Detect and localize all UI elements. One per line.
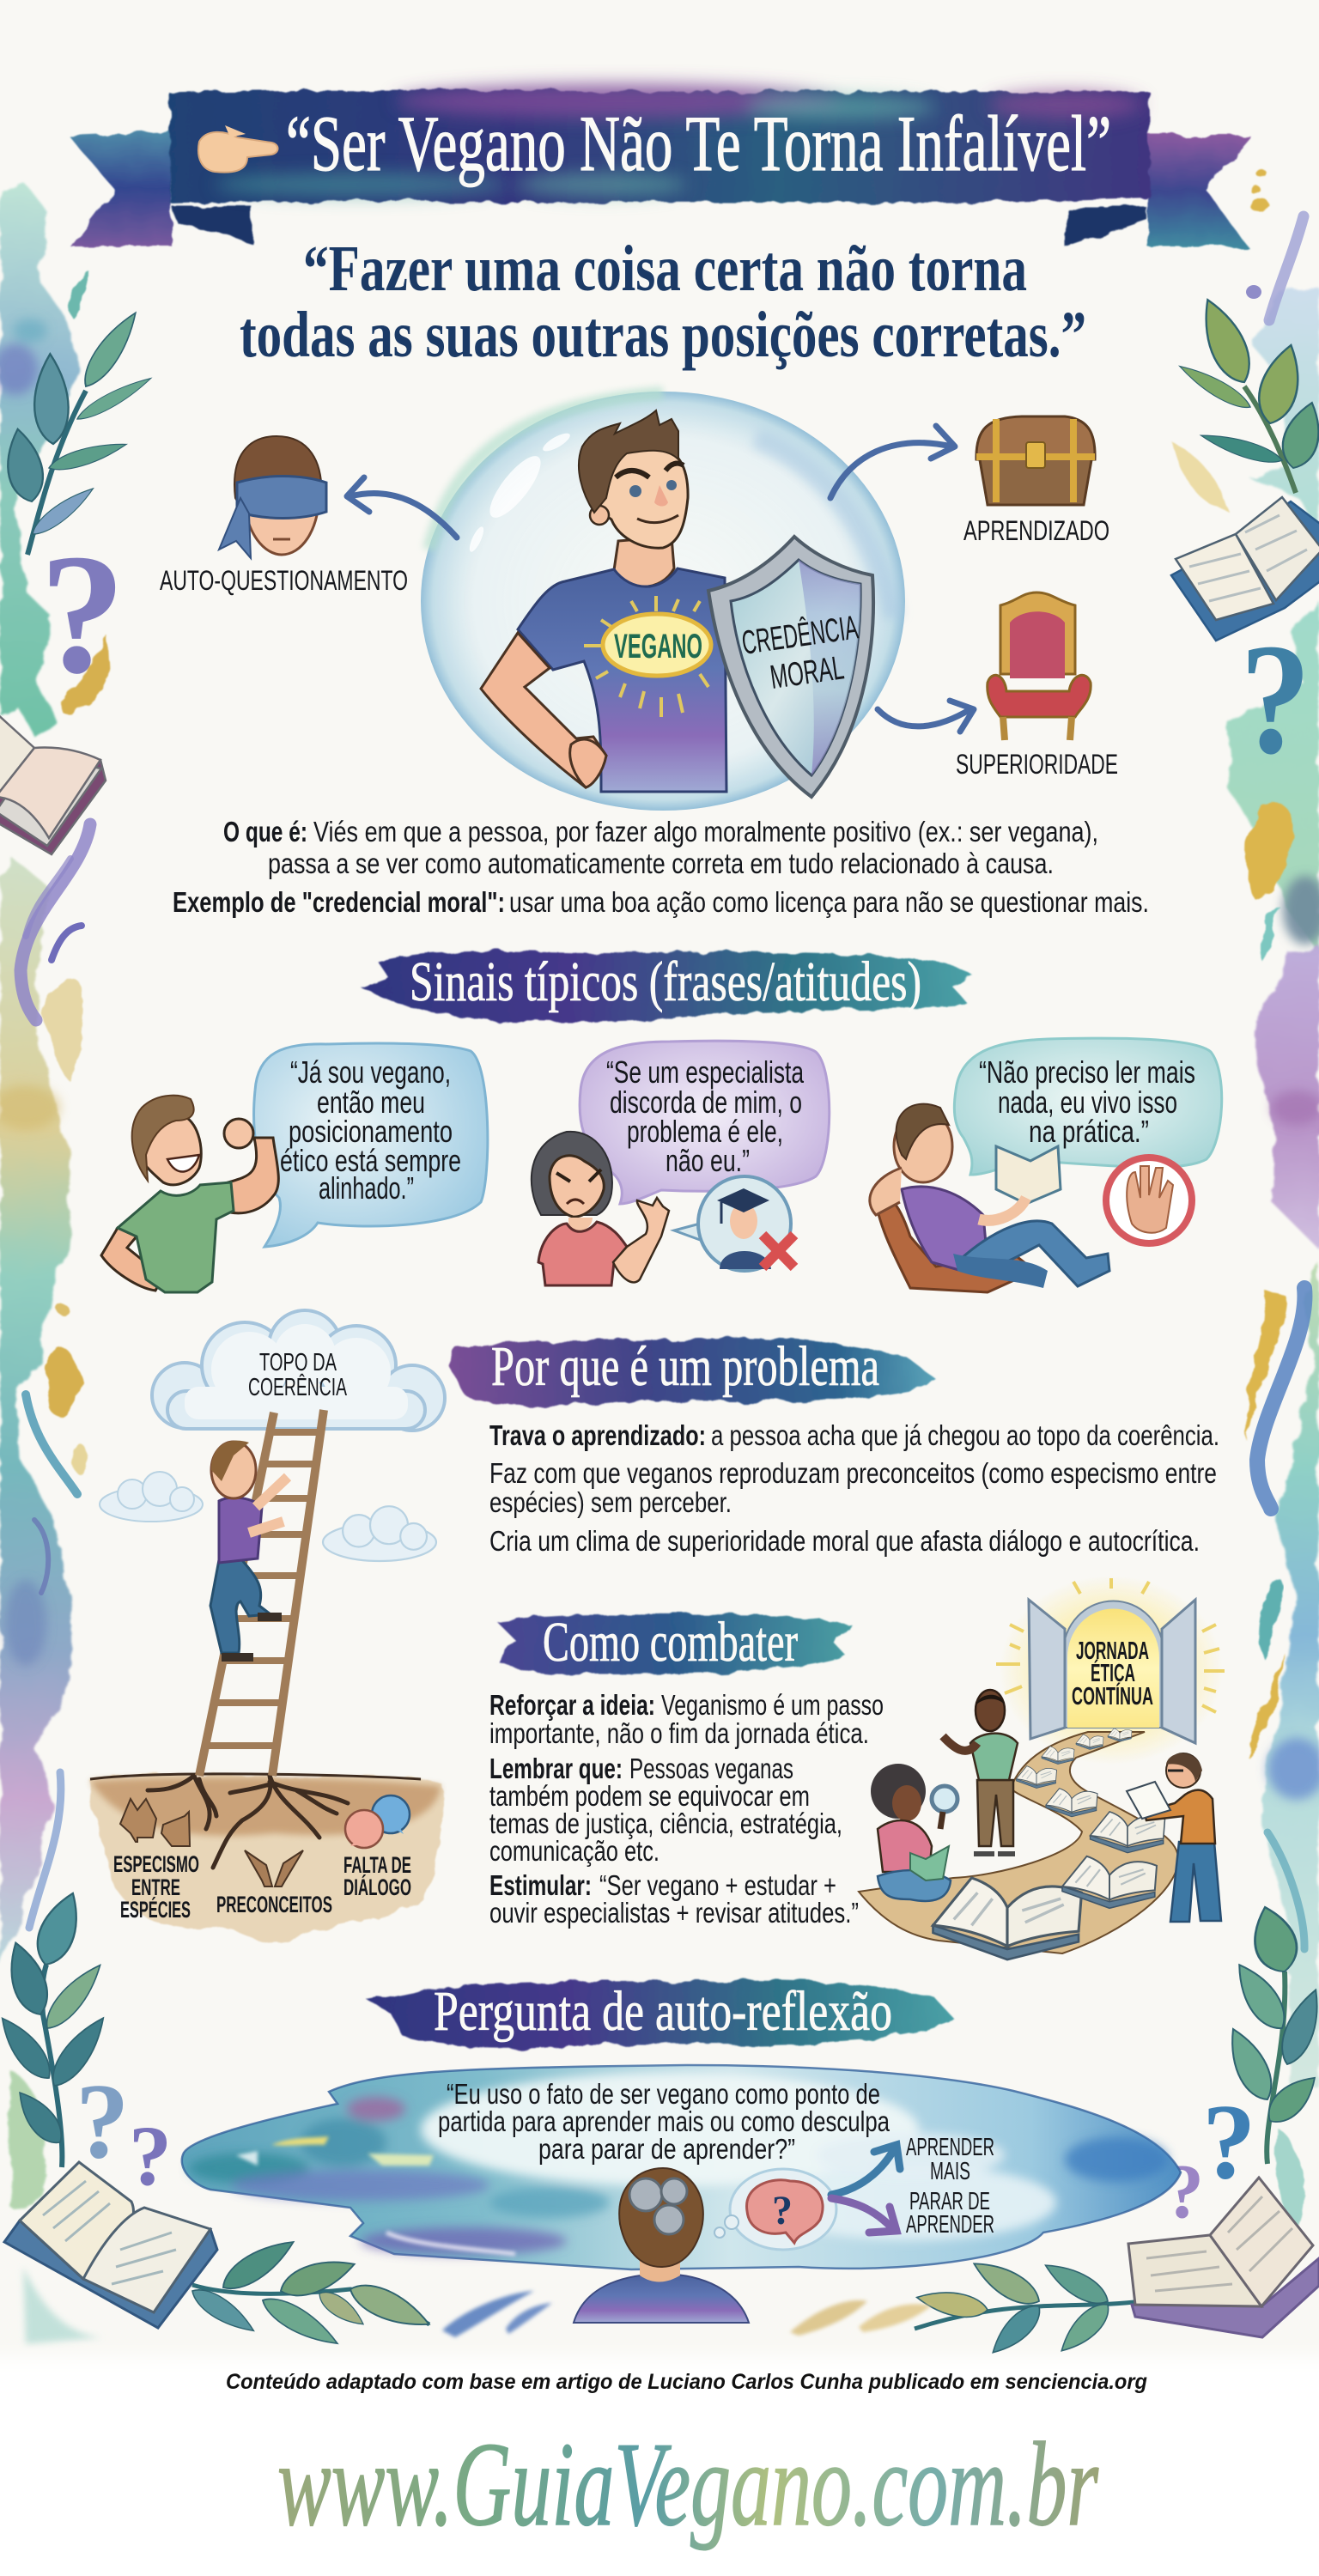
speech bubble 2: problema é ele,	[627, 1114, 783, 1149]
person seen from behind	[574, 2168, 749, 2323]
speech bubble 1: alinhado.”	[319, 1170, 414, 1206]
door: CONTÍNUA	[1072, 1681, 1153, 1710]
main quote: “Fazer uma coisa certa não torna	[303, 233, 1027, 305]
main quote	[240, 233, 1086, 371]
speech bubble 1: posicionamento	[289, 1114, 453, 1149]
ladder illustration: top of coherence to roots	[88, 1310, 445, 1942]
roots in ground: PRECONCEITOS	[216, 1892, 332, 1917]
speech bubble 3: “Não preciso ler mais	[979, 1054, 1195, 1090]
section heading: por que é um problema: Por que é um problema	[491, 1335, 879, 1398]
door glow	[1000, 1576, 1223, 1765]
gold and blue brush dabs	[442, 2291, 932, 2337]
speech bubble 1	[254, 1043, 488, 1247]
icon: treasure chest	[976, 416, 1095, 505]
question marks	[40, 519, 1310, 2234]
question marks: ?	[129, 2108, 172, 2203]
sign 1: flexing man with speech bubble	[101, 1043, 488, 1292]
question marks: ?	[1240, 611, 1310, 787]
roots in ground: DIÁLOGO	[343, 1874, 411, 1900]
how to combat text block: temas de justiça, ciência, estratégia,	[489, 1807, 842, 1839]
door: ÉTICA	[1091, 1658, 1135, 1687]
flexing man	[101, 1096, 278, 1292]
outcome labels: APRENDER	[906, 2134, 994, 2161]
definition text: O que é:	[223, 816, 307, 848]
icon: throne	[988, 592, 1091, 740]
reclining man on armchair	[870, 1104, 1109, 1292]
book: right middle	[1171, 497, 1319, 641]
gold splashes	[1172, 170, 1293, 1758]
section heading: sinais típicos	[361, 951, 972, 1023]
speech bubble 1: “Já sou vegano,	[290, 1054, 451, 1090]
decorative sprig: horizontal bottom left	[187, 2232, 435, 2353]
icon: blindfolded head	[219, 436, 326, 558]
banner body	[169, 90, 1151, 204]
label: superioridade: SUPERIORIDADE	[956, 749, 1118, 780]
book: left middle	[0, 713, 106, 854]
how to combat text block: Veganismo é um passo	[661, 1689, 884, 1721]
decorative sprig: left bottom	[0, 1887, 113, 2167]
how to combat text block: Reforçar a ideia:	[489, 1689, 655, 1721]
outcome labels: PARAR DE	[909, 2188, 990, 2215]
thought bubble with brain: ?	[772, 2188, 793, 2233]
speech bubble 2: “Se um especialista	[606, 1054, 805, 1090]
outcome labels	[906, 2134, 994, 2239]
teal drop and strokes	[67, 271, 89, 319]
VEGANO badge: VEGANO	[614, 628, 702, 665]
pool question text: partida para aprender mais ou como desculpa	[438, 2105, 890, 2137]
ethical journey illustration	[859, 1576, 1225, 1959]
label: aprendizado: APRENDIZADO	[963, 515, 1109, 546]
definition text: passa a se ver como automaticamente correta em tudo relacionado à causa.	[268, 848, 1054, 879]
source credit: Conteúdo adaptado com base em artigo de Luciano Carlos Cunha publicado em senciencia.org	[226, 2370, 1147, 2394]
shield	[708, 537, 873, 797]
problem text block	[489, 1419, 1219, 1557]
book: bottom left	[4, 2162, 217, 2328]
label: auto-questionamento: AUTO-QUESTIONAMENTO	[160, 565, 408, 596]
gold splashes	[41, 635, 109, 1474]
climbing man	[210, 1441, 288, 1662]
how to combat text block: ouvir especialistas + revisar atitudes.”	[489, 1897, 859, 1929]
section heading: pergunta de auto-reflexão: Pergunta de auto-reflexão	[434, 1980, 892, 2043]
standing person	[943, 1690, 1018, 1856]
arrows from the bubble	[347, 426, 974, 732]
outcome labels: APRENDER	[906, 2211, 994, 2239]
angry woman	[532, 1132, 669, 1285]
winding path with books	[859, 1728, 1178, 1959]
how to combat text block: Pessoas veganas	[629, 1753, 793, 1784]
icon: pointing hand	[198, 125, 278, 173]
question marks: ?	[76, 2063, 129, 2181]
branching arrows	[831, 2145, 900, 2233]
speech bubble 2: não eu.”	[666, 1143, 750, 1178]
sign 3: reclining man with speech bubble	[870, 1038, 1222, 1292]
speech bubble 2: discorda de mim, o	[610, 1084, 802, 1120]
VEGANO badge	[584, 596, 711, 717]
ladder	[199, 1410, 324, 1776]
outcome labels: MAIS	[930, 2158, 970, 2185]
man reading paper	[1127, 1753, 1221, 1922]
right side watercolor washes	[1172, 170, 1319, 2228]
book: bottom right	[1128, 2178, 1319, 2337]
definition text: Exemplo de "credencial moral":	[173, 886, 505, 918]
roots in ground	[88, 1774, 443, 1942]
how to combat text block	[489, 1689, 884, 1929]
shield: MORAL	[768, 649, 846, 696]
roots in ground: ESPÉCIES	[120, 1896, 191, 1923]
cloud with label: COERÊNCIA	[248, 1373, 347, 1401]
speech bubble 3	[954, 1038, 1222, 1175]
roots in ground: ENTRE	[131, 1874, 180, 1900]
how to combat text block: comunicação etc.	[489, 1835, 660, 1867]
problem text block: Trava o aprendizado:	[489, 1419, 706, 1451]
man figure	[481, 410, 726, 792]
cloud with label	[152, 1310, 445, 1431]
roots in ground: FALTA DE	[343, 1852, 411, 1878]
banner tails	[69, 131, 1250, 246]
reflection pool	[182, 2065, 1181, 2323]
thought bubble with brain	[714, 2169, 836, 2250]
main quote: todas as suas outras posições corretas.”	[240, 299, 1086, 371]
roots in ground: ESPECISMO	[113, 1851, 199, 1877]
pool question text	[438, 2078, 890, 2165]
glass bubble	[421, 392, 905, 811]
seated woman with magnifier	[871, 1764, 957, 1901]
moral credential bubble with man and shield	[421, 392, 905, 811]
speech bubble 3: na prática.”	[1029, 1114, 1149, 1149]
how to combat text block: também podem se equivocar em	[489, 1780, 810, 1812]
sign 2: angry woman with speech bubble	[532, 1041, 830, 1285]
section heading: como combater: Como combater	[543, 1611, 798, 1674]
speech bubble 1: ético está sempre	[280, 1143, 461, 1178]
decorative sprig: right bottom	[1219, 1901, 1319, 2164]
door	[1029, 1600, 1195, 1743]
definition text	[173, 816, 1149, 918]
decorative sprig: horizontal bottom right	[915, 2253, 1142, 2360]
how to combat text block: “Ser vegano + estudar +	[599, 1869, 836, 1901]
shield: CREDÊNCIA	[739, 609, 860, 662]
decorative sprig: right top	[1176, 293, 1319, 493]
title banner	[69, 84, 1250, 246]
bottom white fade	[0, 2357, 1319, 2576]
icon: stop hand	[1106, 1157, 1192, 1243]
section heading: sinais típicos: Sinais típicos (frases/atitudes)	[410, 951, 921, 1013]
cloud with label: TOPO DA	[259, 1349, 337, 1376]
left side watercolor washes	[0, 185, 109, 2344]
how to combat text block: importante, não o fim da jornada ética.	[489, 1717, 869, 1749]
question marks: ?	[40, 519, 125, 709]
decorative sprig: left top	[1, 307, 154, 555]
question marks: ?	[1202, 2083, 1255, 2202]
definition text: Viés em que a pessoa, por fazer algo moralmente positivo (ex.: ser vegana),	[313, 816, 1098, 848]
speech bubble 2	[580, 1041, 830, 1204]
speech bubble 1: então meu	[317, 1084, 425, 1120]
speech bubble 3: nada, eu vivo isso	[998, 1084, 1177, 1120]
question marks: ?	[1165, 2149, 1204, 2234]
door: JORNADA	[1076, 1637, 1149, 1665]
how to combat text block: Estimular:	[489, 1869, 592, 1901]
small clouds	[100, 1472, 436, 1561]
icon: graduate with cross	[674, 1176, 794, 1271]
pool question text: “Eu uso o fato de ser vegano como ponto de	[447, 2078, 880, 2110]
pool question text: para parar de aprender?”	[538, 2133, 795, 2165]
how to combat text block: Lembrar que:	[489, 1753, 623, 1784]
definition text: usar uma boa ação como licença para não se questionar mais.	[509, 886, 1149, 918]
problem text block: espécies) sem perceber.	[489, 1486, 732, 1518]
